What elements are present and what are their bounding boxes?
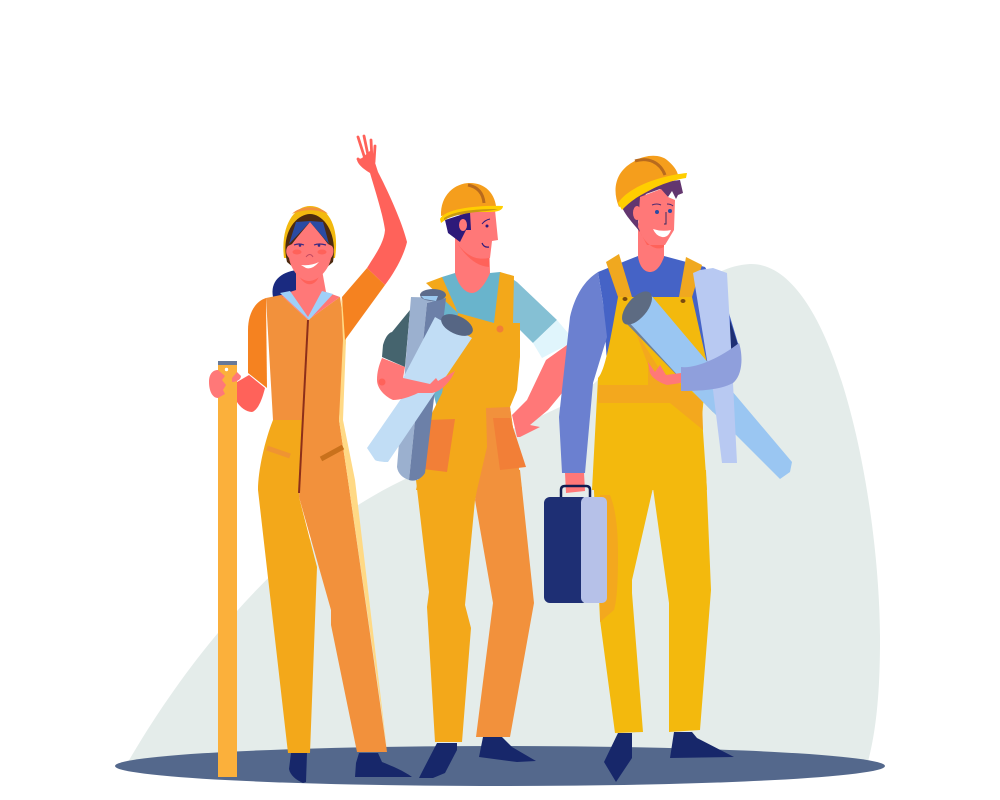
right sleeve: [512, 280, 557, 343]
ground shadow: [115, 746, 885, 786]
shoes: [604, 733, 632, 782]
mouth: [482, 243, 489, 247]
shoes: [419, 743, 457, 778]
hat brim: [618, 173, 687, 210]
head: [457, 210, 498, 259]
hard hat dome: [616, 156, 678, 207]
left trouser leg: [416, 480, 479, 742]
hat stripe: [468, 185, 484, 203]
ponytail: [272, 270, 300, 297]
right trouser leg and torso: [266, 295, 387, 752]
nose: [664, 212, 666, 224]
face: [286, 222, 334, 281]
zipper: [299, 320, 308, 493]
hard hat band: [283, 206, 336, 258]
orange hip panel: [477, 407, 522, 490]
left sleeve: [382, 310, 410, 367]
worker: woman waving: [209, 136, 412, 783]
lower arm: [237, 375, 265, 412]
roll opening: [438, 310, 476, 340]
eyes: [294, 244, 326, 247]
strap buttons: [622, 297, 628, 301]
neck shadow: [640, 232, 664, 248]
neck and chest: [281, 270, 340, 320]
face: [638, 189, 675, 245]
left pocket: [267, 448, 290, 456]
eyes: [655, 210, 659, 214]
left pocket: [423, 419, 455, 472]
hand holding toolbox: [565, 473, 585, 493]
left forearm and hand: [377, 358, 455, 400]
overall bib and straps: [592, 297, 707, 490]
nose: [306, 254, 313, 257]
toolbox shadow: [600, 495, 618, 622]
right forearm sleeve: [681, 343, 741, 391]
headband: [289, 221, 329, 244]
shirt: [598, 256, 740, 390]
smile: [653, 229, 671, 237]
lavender roll: [693, 268, 737, 463]
shoe: right: [355, 753, 412, 777]
roll opening: [616, 286, 658, 330]
neck: [638, 225, 664, 272]
shoe: left: [289, 753, 307, 783]
smile: [301, 262, 319, 268]
neck: [455, 235, 490, 293]
right pocket: [493, 418, 526, 470]
trousers: [593, 470, 711, 733]
shirt: [430, 272, 520, 420]
left sleeve: [559, 272, 607, 473]
hair back: [622, 180, 683, 232]
ear: [633, 206, 641, 220]
worker: right man: [544, 156, 792, 782]
overall button: [496, 326, 504, 332]
right pocket: [321, 447, 343, 459]
cuff: [533, 320, 568, 358]
left strap: [606, 254, 632, 297]
hand on staff: [209, 370, 241, 398]
overall bib and hip: [416, 272, 522, 490]
background blob: [128, 264, 880, 762]
blue roll: [367, 317, 472, 462]
hat stripe: [635, 160, 665, 175]
toolbox handle: [561, 486, 590, 497]
eye and brow: [486, 224, 488, 228]
ear: [459, 219, 467, 231]
hat brim: [440, 206, 503, 223]
hand: [648, 362, 681, 385]
left trouser leg: [258, 420, 317, 753]
worker: middle man: [367, 183, 568, 778]
waist band: [598, 330, 703, 430]
brows: [652, 204, 673, 206]
hat brim underside: [444, 209, 498, 220]
hard hat dome: [441, 183, 496, 216]
yellow side stripe: [339, 297, 387, 750]
hair: [285, 214, 334, 268]
blush: [292, 250, 302, 254]
collar: [280, 291, 333, 320]
staff cap: [218, 361, 237, 365]
blue roll: [623, 318, 718, 415]
elbow: [378, 378, 386, 386]
left sleeve: [248, 298, 267, 388]
arm shadow: [730, 320, 738, 350]
right sleeve: [342, 268, 385, 340]
raised arm: [357, 136, 407, 285]
staff hole: [225, 368, 228, 371]
right trouser leg: [475, 470, 534, 737]
measuring staff: [218, 361, 237, 777]
grey roll: [397, 289, 446, 481]
right strap: [679, 257, 702, 297]
neck shadow: [457, 243, 489, 267]
right arm: [512, 345, 567, 437]
hair: [445, 212, 471, 242]
toolbox: [544, 497, 607, 603]
